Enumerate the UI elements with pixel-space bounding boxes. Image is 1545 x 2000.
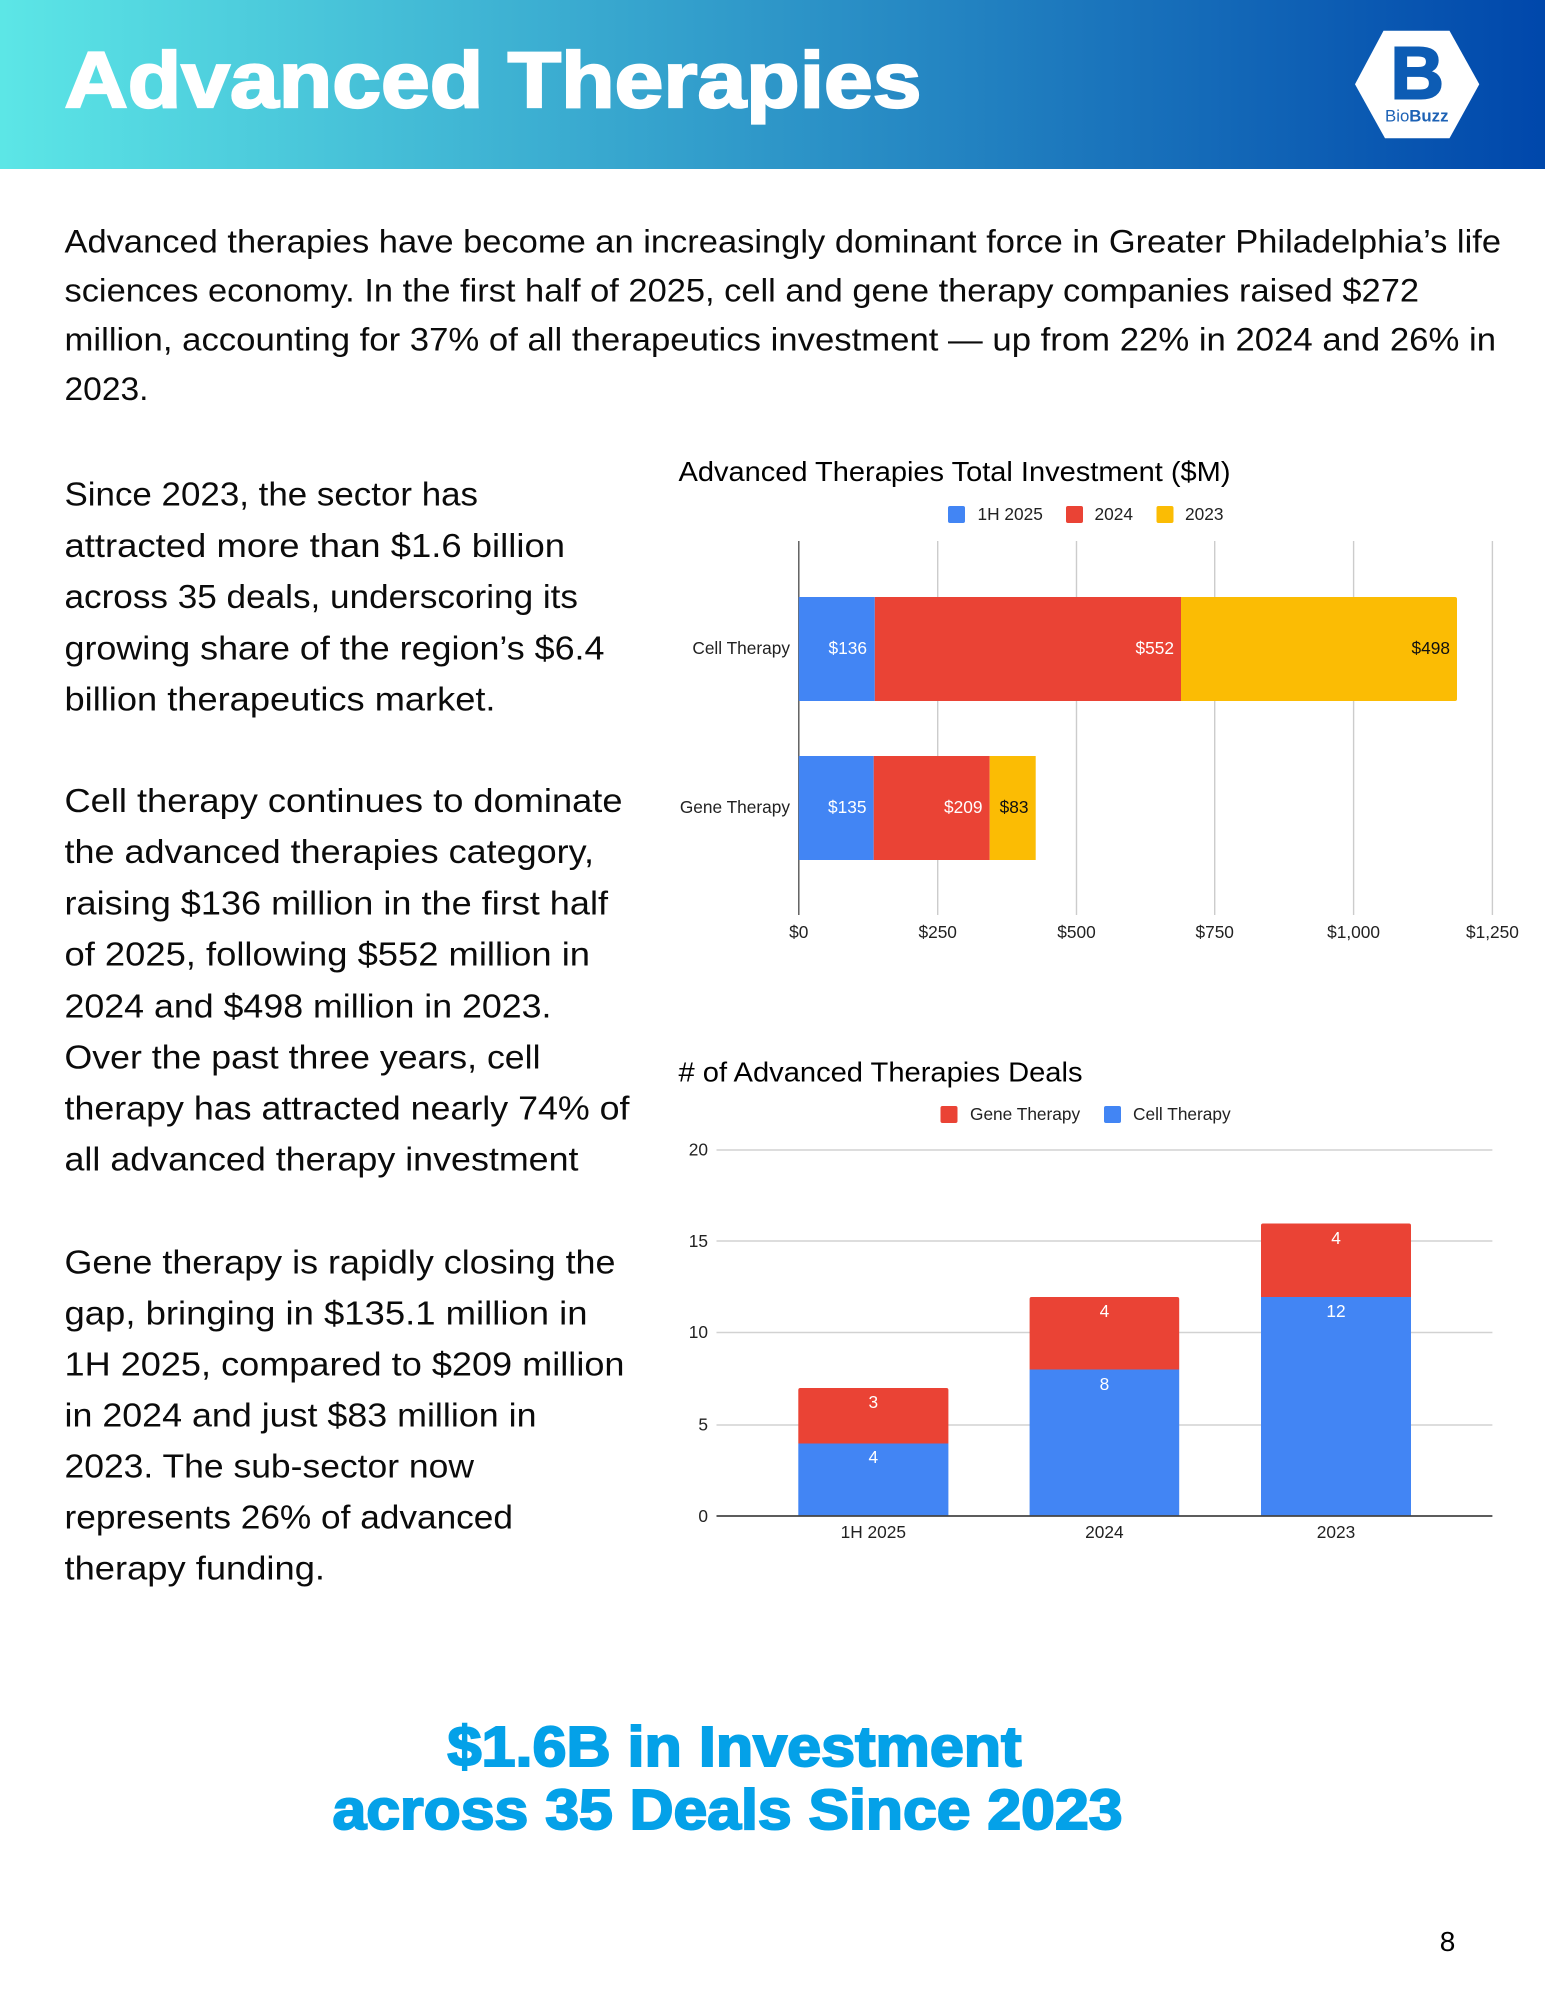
y axis labels: 10 [689, 1322, 708, 1342]
column: 1H 2025: 4 [868, 1447, 878, 1467]
bar: cell therapy: $136 [829, 638, 867, 658]
text block: cell therapy: all advanced therapy investment [64, 1142, 579, 1178]
x axis labels: 1H 2025 [841, 1522, 906, 1542]
y axis labels: 0 [698, 1506, 708, 1526]
x axis labels: $250 [918, 922, 957, 942]
x axis labels [789, 922, 1519, 942]
bar: gene therapy: $135 [828, 797, 866, 817]
chart title: # of Advanced Therapies Deals [678, 1056, 1082, 1088]
legend: Gene Therapy [970, 1104, 1081, 1124]
chart: total investment stacked horizontal bars [678, 456, 1519, 942]
legend: 2024 [1094, 504, 1133, 524]
column: 1H 2025 [798, 1388, 948, 1516]
y axis labels: 15 [689, 1231, 708, 1251]
y axis labels [689, 1140, 708, 1526]
category labels: Cell Therapy [692, 638, 790, 658]
bar: gene therapy [799, 756, 1036, 860]
icon: BioBuzz hexagon logo: B [1390, 32, 1444, 114]
legend [940, 1104, 1231, 1124]
text block: cell therapy: therapy has attracted nearly 74% of [64, 1090, 630, 1128]
category labels: Gene Therapy [680, 797, 790, 817]
x axis labels: $0 [789, 922, 808, 942]
text block: sector overview: billion therapeutics market. [64, 682, 495, 718]
text block: sector overview: Since 2023, the sector has [64, 476, 478, 514]
callout: investment summary: across 35 Deals Since 2023 [332, 1778, 1122, 1842]
text block: gene therapy: in 2024 and just $83 million in [64, 1398, 536, 1434]
text block: cell therapy: 2024 and $498 million in 2023. [64, 988, 552, 1026]
text block: cell therapy: Cell therapy continues to dominate [64, 783, 622, 820]
x axis labels: 2023 [1317, 1522, 1355, 1542]
text block: cell therapy: the advanced therapies category, [64, 834, 594, 871]
column: 2023: 12 [1326, 1301, 1346, 1321]
column: 2023 [1261, 1224, 1411, 1516]
x axis labels: $500 [1057, 922, 1096, 942]
column: 2024: 8 [1100, 1374, 1109, 1394]
column: 2024 [1030, 1297, 1179, 1516]
legend: 2023 [1185, 504, 1223, 524]
bar: gene therapy: $209 [944, 797, 982, 817]
text block: gene therapy: 2023. The sub-sector now [64, 1448, 475, 1486]
x axis labels: $750 [1195, 922, 1234, 942]
x axis labels: 2024 [1085, 1522, 1124, 1542]
text block: sector overview: growing share of the region’s $6.4 [64, 630, 604, 668]
text block: sector overview [64, 476, 604, 718]
x axis labels: $1,250 [1466, 922, 1519, 942]
x axis labels: $1,000 [1327, 922, 1380, 942]
intro paragraph [64, 224, 1501, 407]
bar: gene therapy: $83 [1000, 797, 1028, 817]
intro paragraph: 2023. [64, 371, 148, 407]
text block: gene therapy: therapy funding. [64, 1550, 325, 1588]
text block: cell therapy: raising $136 million in the first half [64, 886, 609, 922]
callout: investment summary: $1.6B in Investment [448, 1715, 1022, 1779]
legend [948, 504, 1223, 524]
chart title: Advanced Therapies Total Investment ($M) [678, 456, 1230, 487]
intro paragraph: Advanced therapies have become an increasingly dominant force in Greater Philadelphia’s life [64, 224, 1501, 260]
text block: cell therapy: Over the past three years, cell [64, 1040, 540, 1076]
x axis labels [841, 1522, 1355, 1542]
icon: BioBuzz hexagon logo: BioBuzz [1385, 107, 1448, 126]
callout: investment summary [332, 1715, 1122, 1842]
page number: 8 [1440, 1926, 1455, 1957]
bar: cell therapy: $552 [1136, 638, 1174, 658]
column: 2023: 4 [1331, 1228, 1341, 1248]
legend: 1H 2025 [978, 504, 1043, 524]
column: 2024: 4 [1100, 1301, 1110, 1321]
legend: Cell Therapy [1133, 1104, 1231, 1124]
title: Advanced Therapies [64, 35, 921, 124]
chart: number of deals stacked columns [678, 1056, 1492, 1542]
text block: gene therapy: represents 26% of advanced [64, 1500, 513, 1536]
y axis labels: 20 [689, 1140, 708, 1160]
intro paragraph: sciences economy. In the first half of 2025, cell and gene therapy companies raised $272 [64, 273, 1419, 309]
y axis labels: 5 [698, 1414, 708, 1434]
category labels [680, 638, 790, 817]
text block: gene therapy [64, 1244, 624, 1588]
intro paragraph: million, accounting for 37% of all therapeutics investment — up from 22% in 2024 and 26% in [64, 322, 1496, 358]
header banner [0, 0, 1545, 169]
text block: gene therapy: 1H 2025, compared to $209 million [64, 1346, 624, 1384]
column: 1H 2025: 3 [868, 1392, 878, 1412]
text block: gene therapy: gap, bringing in $135.1 million in [64, 1296, 588, 1332]
bar: cell therapy [799, 597, 1457, 701]
text block: cell therapy [64, 783, 630, 1178]
icon: BioBuzz hexagon logo [1355, 31, 1479, 138]
text block: gene therapy: Gene therapy is rapidly closing the [64, 1244, 616, 1282]
text block: cell therapy: of 2025, following $552 million in [64, 936, 590, 974]
text block: sector overview: across 35 deals, underscoring its [64, 579, 578, 616]
bar: cell therapy: $498 [1412, 638, 1450, 658]
text block: sector overview: attracted more than $1.6 billion [64, 528, 565, 565]
